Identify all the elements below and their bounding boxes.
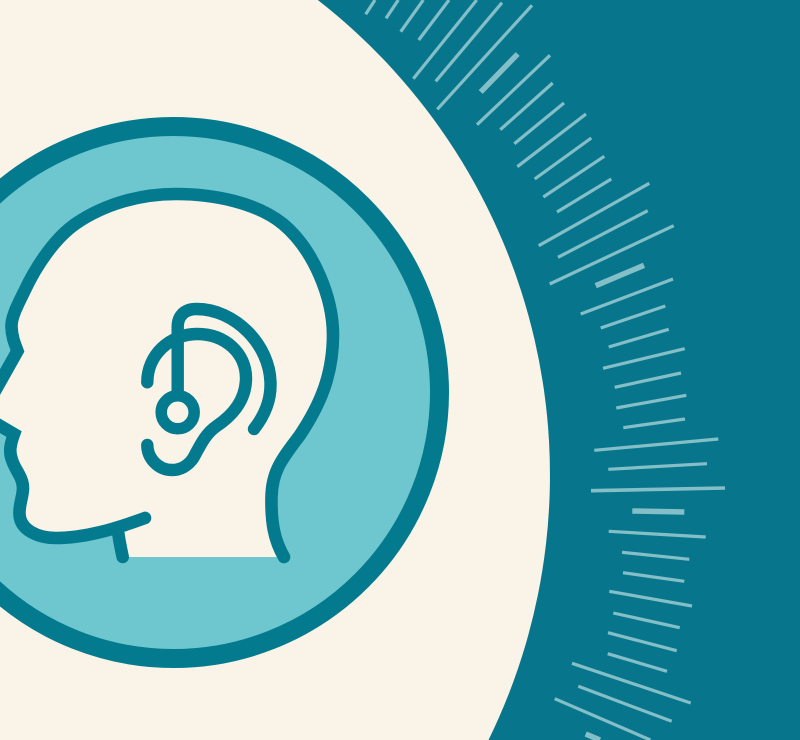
icon: ear with hearing aid — [147, 309, 271, 470]
head outline — [0, 194, 333, 557]
badge circle with teal ring — [0, 126, 440, 658]
head silhouette fill — [0, 194, 333, 557]
sound wave ticks — [366, 0, 725, 740]
large cream circle — [0, 0, 550, 740]
